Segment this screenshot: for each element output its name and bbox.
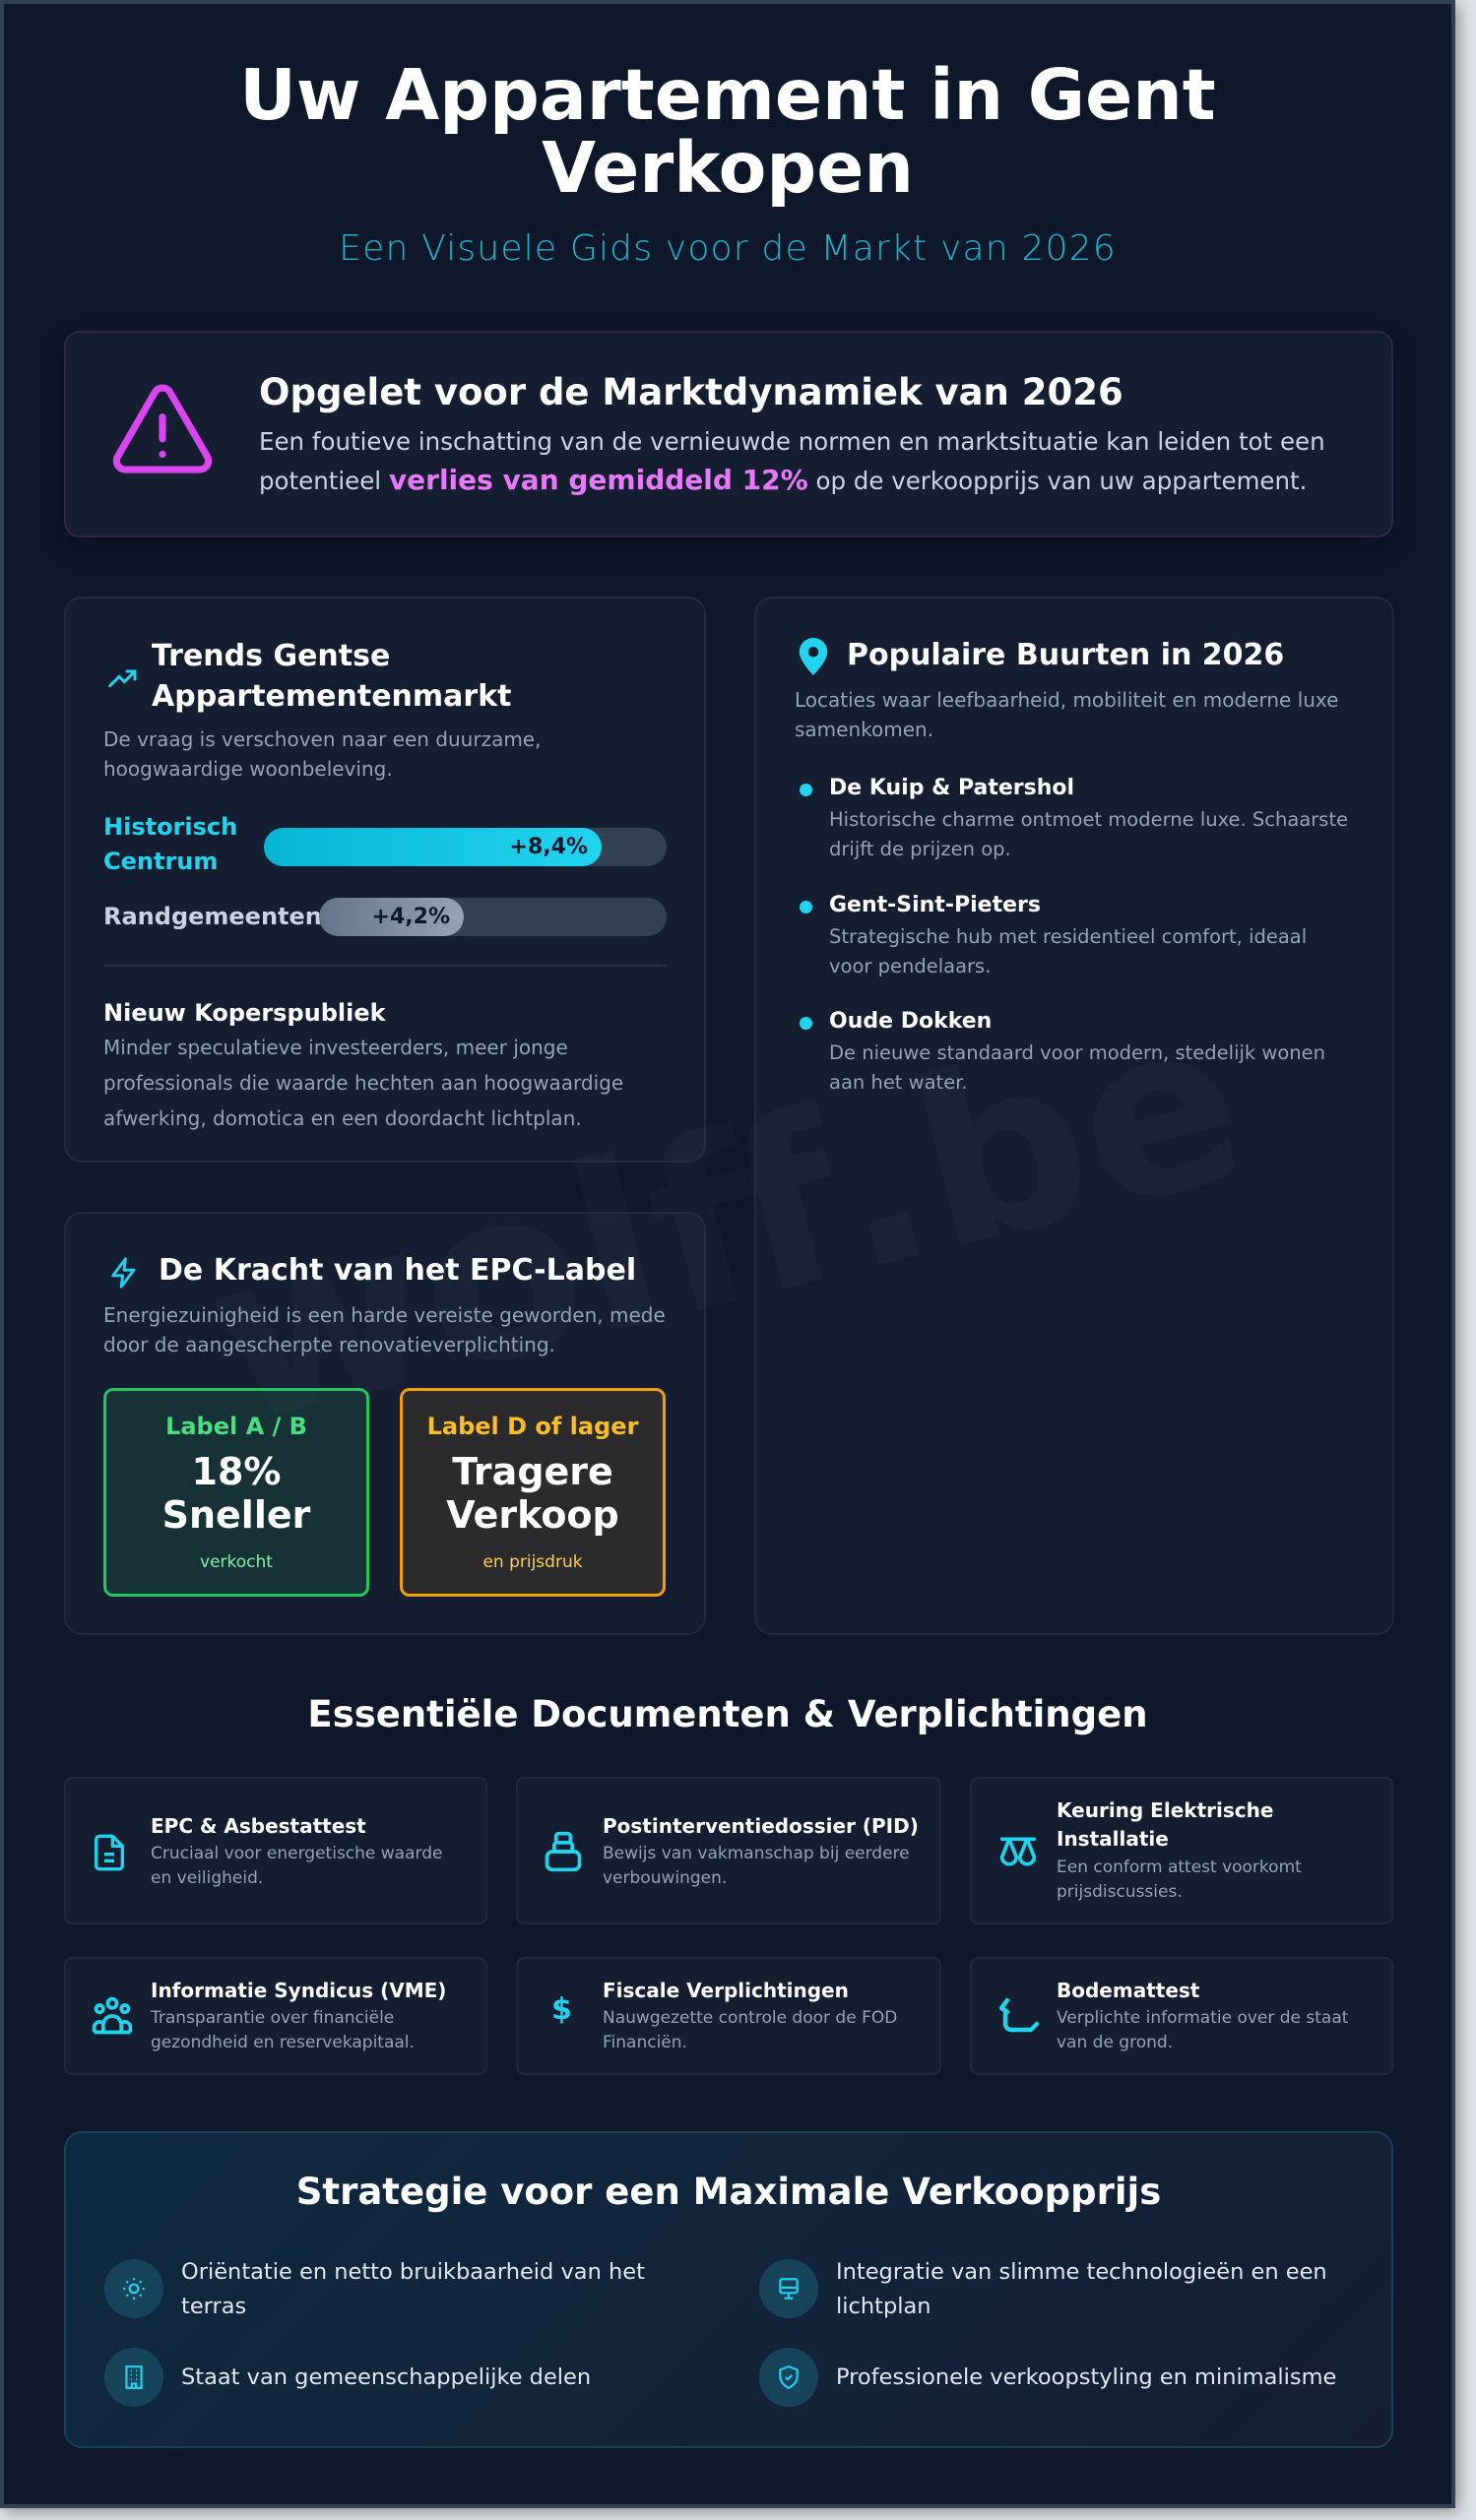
item: Gent-Sint-Pieters	[800, 893, 1307, 977]
doc: EPC: en veiligheid.	[151, 1868, 263, 1888]
doc: electric: Keuring Elektrische	[1057, 1798, 1273, 1822]
stat: label D: Tragere	[452, 1450, 613, 1493]
documents grid	[64, 1777, 1393, 2075]
doc: EPC: Cruciaal voor energetische waarde	[151, 1844, 442, 1863]
bar chart: +8,4%	[510, 835, 588, 859]
item: De Kuip	[800, 776, 1348, 860]
doc: fiscal	[516, 1957, 941, 2075]
item: common parts: Staat van gemeenschappelijke delen	[181, 2364, 591, 2390]
item: orientation	[104, 2259, 645, 2319]
alert text: Een foutieve inschatting van de vernieuwde normen en marktsituatie kan leiden tot een potentieel verlies van gemiddeld 12% op de verkoopprijs van uw appartement.	[259, 427, 1325, 496]
title: Verkopen	[542, 127, 914, 209]
doc: fiscal: Nauwgezette controle door de FOD	[603, 2008, 897, 2028]
doc: electric: Een conform attest voorkomt	[1057, 1858, 1302, 1877]
doc: electric: Installatie	[1057, 1827, 1169, 1851]
doc: fiscal: $	[551, 1992, 572, 2027]
EPC heading: De Kracht van het EPC-Label	[159, 1253, 636, 1288]
stat: label D	[400, 1388, 666, 1597]
doc: soil	[970, 1957, 1393, 2075]
trends text: De vraag is verschoven naar een duurzame, hoogwaardige woonbeleving.	[103, 727, 541, 781]
item: styling: Professionele verkoopstyling en minimalisme	[836, 2364, 1336, 2390]
doc: fiscal: Financiën.	[603, 2033, 687, 2052]
stat: label D: en prijsdruk	[482, 1552, 583, 1572]
doc: PID: Postinterventiedossier (PID)	[603, 1814, 919, 1838]
stat: label A/B	[103, 1388, 369, 1597]
icon: bolt	[111, 1257, 136, 1289]
heading: documents: Essentiële Documenten & Verplichtingen	[307, 1693, 1148, 1735]
stat: label D: Verkoop	[446, 1493, 619, 1537]
EPC text: Energiezuinigheid is een harde vereiste geworden, mede door de aangescherpte renovatieverplichting.	[103, 1303, 666, 1356]
new buyers block: Nieuw Koperspubliek	[103, 999, 386, 1027]
trends heading	[152, 639, 512, 714]
doc: syndicus: Transparantie over financiële	[151, 2008, 394, 2028]
panel: EPC	[64, 1212, 706, 1635]
new buyers block: Minder speculatieve investeerders, meer jonge professionals die waarde hechten aan hoogwaardige afwerking, domotica en een doordacht lichtplan.	[103, 1036, 623, 1130]
item: common parts	[104, 2348, 591, 2407]
stat: label A/B: Sneller	[162, 1493, 310, 1537]
doc: fiscal: Fiscale Verplichtingen	[603, 1979, 849, 2002]
neighbourhoods text: Locaties waar leefbaarheid, mobiliteit en moderne luxe samenkomen.	[795, 688, 1338, 741]
item: orientation: terras	[181, 2294, 246, 2319]
strategy heading: Strategie voor een Maximale Verkoopprijs	[296, 2171, 1161, 2213]
item: De Kuip: Historische charme ontmoet moderne luxe. Schaarste drijft de prijzen op.	[829, 808, 1348, 860]
doc: electric: prijsdiscussies.	[1057, 1882, 1183, 1902]
panel: alert	[64, 331, 1393, 537]
trends heading: Trends Gentse	[152, 639, 390, 673]
bar chart: Randgemeenten	[103, 903, 322, 930]
bar chart: Centrum	[103, 848, 218, 875]
item: Gent-Sint-Pieters: Gent-Sint-Pieters	[829, 893, 1041, 917]
item: Gent-Sint-Pieters: Strategische hub met residentieel comfort, ideaal voor pendelaars.	[829, 925, 1307, 977]
doc: PID	[516, 1777, 941, 1924]
icon: trending up	[108, 669, 136, 687]
title	[239, 54, 1216, 209]
doc: soil: Verplichte informatie over de staat	[1057, 2008, 1348, 2028]
item: Oude Dokken	[800, 1009, 1325, 1094]
item: orientation: Oriëntatie en netto bruikbaarheid van het	[181, 2259, 645, 2285]
item: smart tech	[759, 2259, 1327, 2319]
item: styling	[759, 2348, 1336, 2407]
doc: syndicus: gezondheid en reservekapitaal.	[151, 2033, 415, 2052]
watermark: wolff.be	[184, 964, 1268, 1479]
item: De Kuip: De Kuip & Patershol	[829, 776, 1074, 800]
doc: soil: Bodemattest	[1057, 1979, 1199, 2002]
item: Oude Dokken: Oude Dokken	[829, 1009, 992, 1034]
bar chart: +4,2%	[372, 905, 450, 929]
doc: electric	[970, 1777, 1393, 1924]
doc: EPC: EPC & Asbestattest	[151, 1814, 366, 1838]
alert heading: Opgelet voor de Marktdynamiek van 2026	[259, 371, 1123, 413]
item: smart tech: lichtplan	[836, 2294, 931, 2319]
doc: PID: verbouwingen.	[603, 1868, 727, 1888]
item: Oude Dokken: De nieuwe standaard voor modern, stedelijk wonen aan het water.	[829, 1041, 1325, 1094]
stat: label A/B: 18%	[192, 1450, 281, 1493]
doc: syndicus	[64, 1957, 487, 2075]
title: Uw Appartement in Gent	[239, 54, 1216, 136]
doc: EPC	[64, 1777, 487, 1924]
doc: PID: Bewijs van vakmanschap bij eerdere	[603, 1844, 910, 1863]
stat: label A/B: verkocht	[200, 1552, 273, 1572]
stat: label A/B: Label A / B	[165, 1413, 307, 1440]
panel: trends	[64, 597, 706, 1163]
neighbourhoods heading: Populaire Buurten in 2026	[847, 638, 1284, 672]
stat: label D: Label D of lager	[427, 1413, 638, 1440]
bar chart	[103, 813, 667, 936]
doc: soil: van de grond.	[1057, 2033, 1173, 2052]
panel: strategy	[64, 2131, 1393, 2448]
bar chart: Historisch	[103, 813, 237, 841]
trends heading: Appartementenmarkt	[152, 679, 512, 714]
item: smart tech: Integratie van slimme technologieën en een	[836, 2259, 1327, 2285]
doc: syndicus: Informatie Syndicus (VME)	[151, 1979, 446, 2002]
subtitle: Een Visuele Gids voor de Markt van 2026	[339, 228, 1117, 269]
icon: warning triangle	[112, 384, 213, 473]
icon: map pin	[800, 638, 827, 675]
panel: neighbourhoods	[754, 597, 1394, 1635]
